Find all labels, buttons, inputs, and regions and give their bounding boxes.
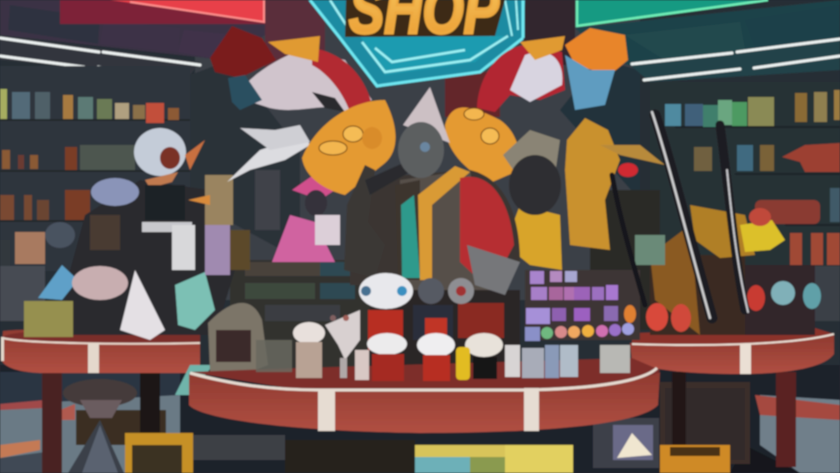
top right red creature — [477, 28, 628, 112]
pink character — [272, 176, 340, 262]
bottom boxes — [125, 418, 730, 473]
table: left — [1, 329, 200, 473]
jar — [208, 303, 268, 376]
ceiling lights — [0, 38, 840, 80]
top left red creature — [210, 26, 372, 112]
right characters — [503, 118, 821, 335]
left table toys blending — [256, 340, 292, 372]
product shelf: purple boxes — [525, 270, 640, 341]
left character group — [24, 128, 250, 395]
left shelves — [0, 66, 190, 321]
neon sign: red panel — [60, 0, 265, 24]
swords — [612, 112, 748, 318]
ceiling right — [575, 0, 840, 82]
neon sign: green panel — [577, 0, 768, 26]
ceiling left — [0, 0, 265, 78]
floor — [0, 365, 840, 473]
central figure — [344, 87, 520, 295]
orange blob left — [302, 100, 396, 195]
right shelves — [650, 82, 840, 321]
orange blob right — [445, 108, 520, 183]
neon sign: shop — [308, 0, 525, 87]
product shelf: centre — [230, 260, 520, 380]
table: centre — [189, 358, 660, 433]
stool — [63, 379, 137, 473]
centre table toys — [293, 273, 630, 381]
white horned creature — [227, 125, 310, 230]
crates under tables — [76, 382, 750, 464]
table: right — [630, 328, 834, 467]
